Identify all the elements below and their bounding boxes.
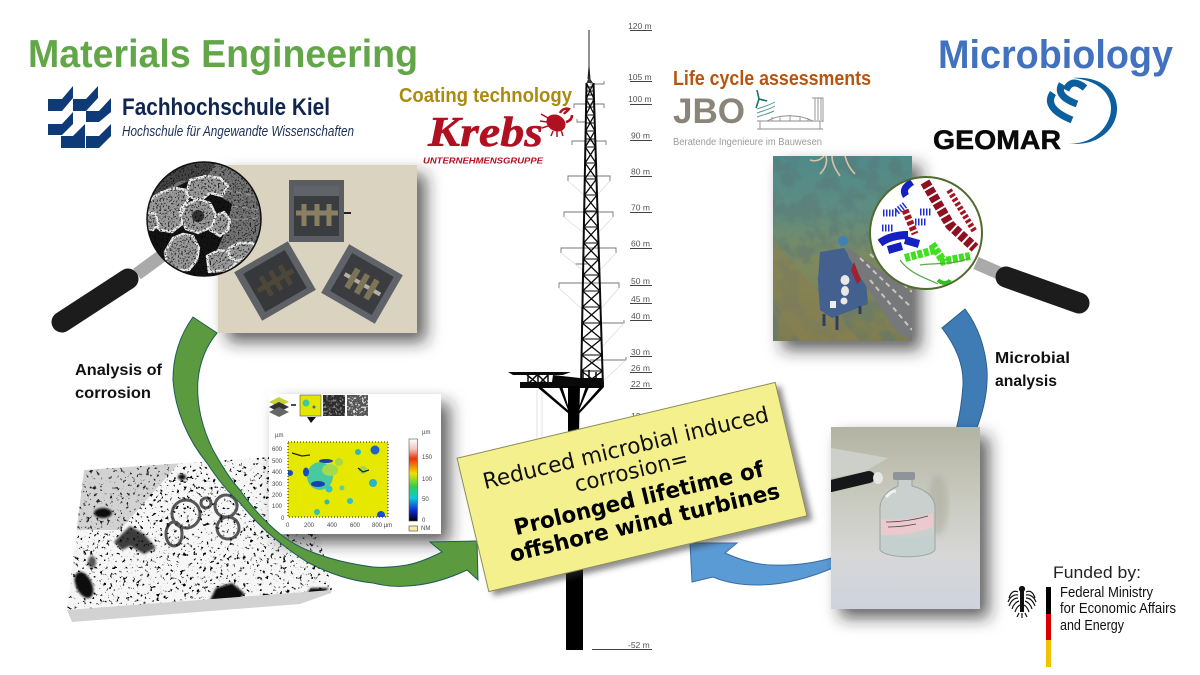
- height scale: 22 m: [631, 379, 650, 389]
- colour scale: 50: [422, 497, 429, 503]
- logo: Fachhochschule Kiel: [48, 86, 354, 148]
- magnifier handle: [62, 279, 128, 322]
- label: Microbial analysis: [995, 350, 1070, 390]
- label: Analysis of corrosion: [75, 362, 163, 402]
- icon: wind turbine and bridge: [756, 90, 823, 129]
- height map plot: 800 µm: [372, 523, 392, 529]
- ministry name: Federal Ministry: [1060, 585, 1154, 601]
- lens micrograph: [148, 162, 260, 276]
- height scale: 60 m: [631, 238, 650, 248]
- slab side: [67, 588, 332, 622]
- magnifier neck: [137, 255, 163, 274]
- icon: federal eagle: [1008, 586, 1036, 618]
- colour scale: 100: [422, 477, 433, 483]
- label: Microbial analysis: Microbial: [995, 350, 1070, 367]
- height map plot: 200: [304, 523, 315, 529]
- slab top texture: [67, 457, 332, 610]
- arrow: green curved arrow: [173, 317, 478, 586]
- frame: left sample box: [234, 241, 316, 321]
- height map plot: 100: [272, 504, 283, 510]
- funding notice: [1008, 564, 1176, 667]
- callout line 4: offshore wind turbines: [507, 479, 782, 568]
- ministry name: for Economic Affairs: [1060, 601, 1176, 617]
- icon: magnifier with corrosion micrograph: [62, 162, 261, 322]
- label: Microbial analysis: analysis: [995, 373, 1057, 390]
- heading: Coating technology: Coating technology: [399, 84, 573, 107]
- colour scale: NM: [421, 526, 430, 532]
- callout line 3: Prolonged lifetime of: [512, 457, 767, 541]
- icon: GEOMAR swirl: [1050, 78, 1117, 144]
- mast cross arms: [559, 81, 626, 360]
- height map plot: 500: [272, 459, 283, 465]
- height map plot: 400: [272, 470, 283, 476]
- mast light bracing: [537, 181, 626, 450]
- wind mast technical drawing: [508, 21, 652, 650]
- colour scale: µm: [422, 430, 430, 436]
- height scale: -52 m: [628, 640, 650, 650]
- height map plot: 400: [327, 523, 338, 529]
- frame: top sample box: [289, 180, 351, 242]
- label: Analysis of corrosion: corrosion: [75, 385, 151, 402]
- heading: Life cycle assessments: Life cycle assessments: [673, 67, 871, 90]
- photo: sample vial: [831, 427, 980, 609]
- height scale: 90 m: [631, 130, 650, 140]
- mast spire: [588, 30, 590, 78]
- logo text: GEOMAR: GEOMAR: [933, 125, 1061, 155]
- height map plot: 200: [272, 493, 283, 499]
- magnifier handle: [1006, 277, 1079, 303]
- logo subtitle: Unternehmensgruppe: UNTERNEHMENSGRUPPE: [423, 156, 543, 166]
- photo: corrosion test frames: [218, 165, 417, 333]
- logo: GEOMAR: [933, 78, 1117, 155]
- height scale: 100 m: [628, 94, 652, 104]
- height scale: 105 m: [628, 72, 652, 82]
- height scale: 40 m: [631, 311, 650, 321]
- height scale: 12 m: [631, 411, 650, 421]
- colour scale: 0: [422, 518, 426, 524]
- layer thumbnails: [269, 395, 368, 423]
- ministry name: [1060, 585, 1176, 634]
- lander frame: [818, 248, 868, 318]
- vial scene: [831, 427, 980, 609]
- height scale: 50 m: [631, 276, 650, 286]
- logo text: Krebs: Krebs: [427, 110, 543, 156]
- height map plot: µm: [275, 433, 283, 439]
- helideck platform: [508, 370, 604, 388]
- chart card: surface height map: [269, 394, 441, 534]
- icon: Fachhochschule Kiel emblem: [48, 86, 111, 148]
- height map plot: [272, 433, 392, 529]
- height scale: 70 m: [631, 202, 650, 212]
- heading: Microbiology: Microbiology: [938, 33, 1174, 77]
- height map plot: 600: [350, 523, 361, 529]
- heading: Materials Engineering: Materials Engineering: [28, 33, 418, 76]
- photo shadow base: [831, 427, 980, 609]
- frame: right sample box: [321, 244, 403, 324]
- vial: [880, 479, 935, 557]
- magnifier neck: [976, 263, 999, 273]
- photo: corrosion surface 3D scan: [60, 450, 340, 622]
- flag bar: [1046, 587, 1051, 667]
- arrow: blue curved arc: [942, 309, 987, 430]
- card background: [269, 394, 441, 534]
- seabed imagery: [773, 156, 912, 341]
- height scale: 26 m: [631, 363, 650, 373]
- height scale: [592, 21, 652, 650]
- callout box: [457, 382, 807, 592]
- height scale: 30 m: [631, 347, 650, 357]
- height map plot: 300: [272, 482, 283, 488]
- height scale: 120 m: [628, 21, 652, 31]
- photo shadow base: [773, 156, 912, 341]
- logo text: JBO: JBO: [673, 92, 745, 131]
- lens: protein ribbon: [870, 177, 982, 289]
- ministry name: and Energy: [1060, 618, 1125, 634]
- height scale: 45 m: [631, 294, 650, 304]
- height map plot: 600: [272, 447, 283, 453]
- label: Funded by: Funded by:: [1053, 564, 1141, 582]
- logo subtitle: Hochschule für Angewandte Wissenschaften: [122, 124, 354, 140]
- mast lattice: [581, 83, 603, 387]
- label: Analysis of corrosion: Analysis of: [75, 362, 163, 379]
- photo background: [218, 165, 417, 333]
- callout: key message: [457, 382, 807, 592]
- height scale: 80 m: [631, 166, 650, 176]
- icon: crab: [540, 109, 572, 137]
- foundation column: [537, 386, 604, 650]
- logo: JBO: [673, 90, 823, 148]
- colour scale: 150: [422, 455, 433, 461]
- callout line 2: corrosion=: [572, 447, 691, 498]
- height map plot: 0: [281, 516, 285, 522]
- colour scale: [409, 430, 433, 532]
- logo subtitle: Beratende Ingenieure im Bauwesen: [673, 136, 822, 148]
- height map plot: 0: [286, 523, 290, 529]
- photo: seabed lander: [773, 156, 912, 341]
- arrow: blue lower arrowhead: [690, 543, 835, 585]
- callout line 1: Reduced microbial induced: [481, 403, 771, 495]
- logo text: Fachhochschule Kiel: Fachhochschule Kiel: [122, 94, 330, 121]
- icon: magnifier with protein structure: [870, 177, 1079, 303]
- logo: Krebs: [423, 109, 572, 166]
